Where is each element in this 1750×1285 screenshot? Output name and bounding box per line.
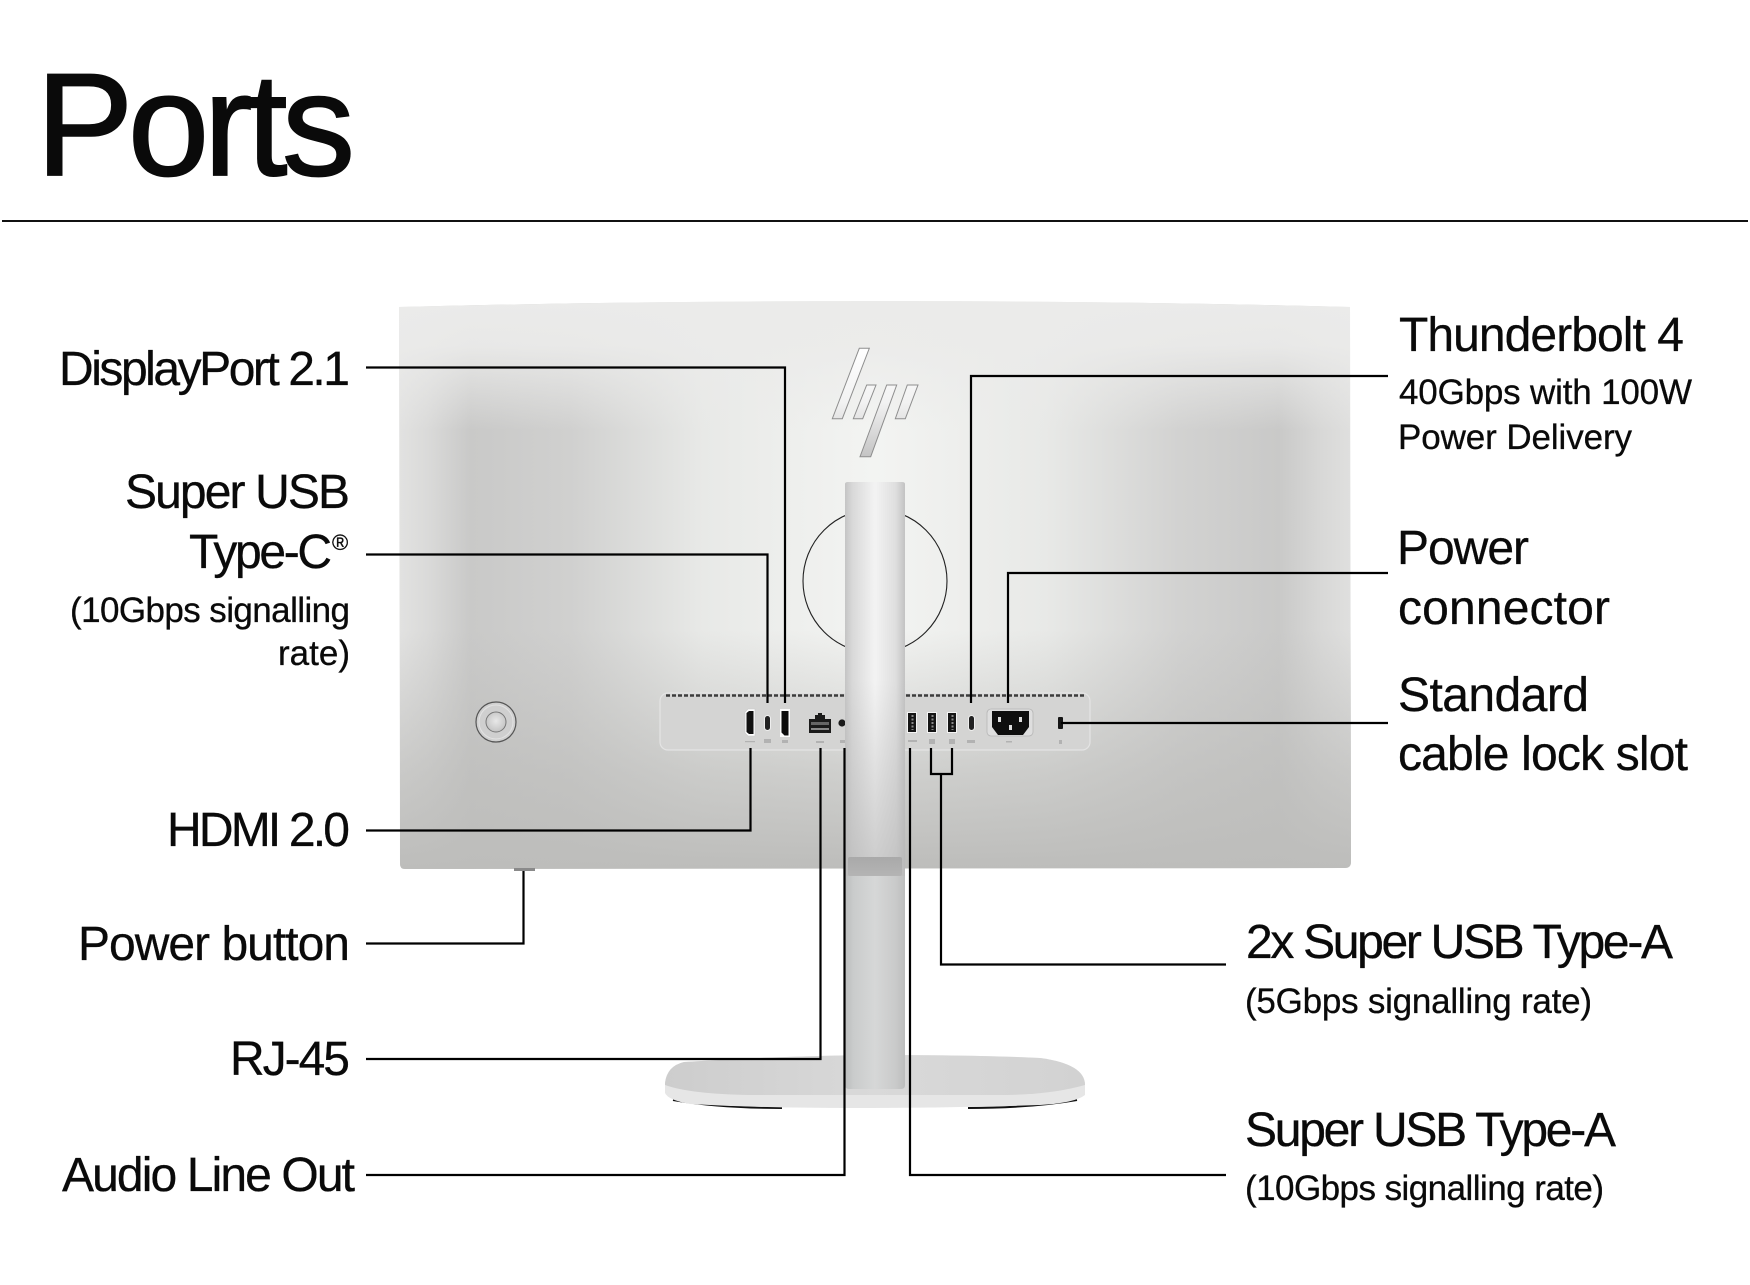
label: Thunderbolt 4: Power Delivery bbox=[1398, 418, 1632, 457]
monitor back panel bbox=[399, 301, 1351, 869]
label: Super USB Type-C bbox=[70, 466, 350, 673]
label: Super USB Type-C: Type-C bbox=[189, 526, 332, 579]
port: Super USB Type-A 5Gbps bbox=[927, 712, 937, 733]
leader line: Power button bbox=[366, 871, 524, 944]
leader line: RJ-45 bbox=[366, 748, 820, 1059]
port: RJ-45 bbox=[809, 713, 831, 733]
label: 2x Super USB Type-A bbox=[1245, 916, 1673, 1021]
port: lock slot bbox=[1058, 717, 1063, 729]
label: Thunderbolt 4: 40Gbps with 100W bbox=[1399, 373, 1692, 412]
leader line: 2x Super USB Type-A bbox=[931, 748, 1226, 964]
label: Power button: Power button bbox=[78, 918, 350, 971]
leader line: DisplayPort 2.1 bbox=[366, 368, 785, 703]
label: Super USB Type-A: Super USB Type-A bbox=[1245, 1104, 1616, 1157]
label: 2x Super USB Type-A: 2x Super USB Type-A bbox=[1246, 916, 1673, 969]
label: Super USB Type-C: (10Gbps signalling bbox=[70, 591, 350, 630]
label: Standard cable lock slot: Standard bbox=[1398, 669, 1589, 722]
label: DisplayPort 2.1: DisplayPort 2.1 bbox=[59, 343, 350, 396]
port: DisplayPort bbox=[780, 709, 790, 737]
label: Power connector: Power bbox=[1397, 522, 1529, 575]
label: Standard cable lock slot bbox=[1398, 669, 1688, 781]
port panel bbox=[660, 693, 1090, 750]
label: Super USB Type-A: (10Gbps signalling rate) bbox=[1245, 1169, 1604, 1208]
label: Power connector bbox=[1397, 522, 1610, 635]
label: RJ-45: RJ-45 bbox=[230, 1033, 350, 1086]
title: Ports bbox=[36, 43, 355, 206]
port: Super USB Type-A 5Gbps bbox=[947, 712, 957, 733]
label: Super USB Type-C: Super USB bbox=[125, 466, 350, 519]
stand neck bbox=[845, 482, 905, 1089]
label: Power connector: connector bbox=[1398, 582, 1610, 635]
leader line: Power connector bbox=[1008, 573, 1388, 703]
monitor illustration bbox=[399, 301, 1351, 1108]
port: Super USB Type-A 10Gbps bbox=[907, 712, 917, 733]
leader line: HDMI 2.0 bbox=[366, 748, 750, 830]
label: Standard cable lock slot: cable lock slot bbox=[1398, 728, 1688, 781]
leader line: Audio Line Out bbox=[366, 748, 844, 1175]
port: audio jack bbox=[838, 719, 846, 727]
leader line: Super USB Type-C bbox=[366, 554, 768, 703]
mount circle bbox=[803, 509, 947, 653]
port: HDMI bbox=[745, 709, 755, 736]
label: 2x Super USB Type-A: (5Gbps signalling rate) bbox=[1245, 982, 1592, 1021]
label: Thunderbolt 4 bbox=[1398, 309, 1692, 457]
port icons bbox=[745, 739, 1062, 744]
label: Super USB Type-C: ® bbox=[332, 530, 348, 555]
port: Thunderbolt 4 bbox=[968, 715, 975, 731]
leader line: Standard cable lock slot bbox=[1061, 722, 1388, 724]
leader line: Thunderbolt 4 bbox=[971, 376, 1388, 703]
port: Super USB Type-C bbox=[764, 715, 771, 731]
base of stand bbox=[665, 1055, 1085, 1108]
rear dial button bbox=[476, 702, 516, 742]
label: Super USB Type-A bbox=[1245, 1104, 1616, 1208]
port: power connector bbox=[987, 709, 1033, 736]
power button nub bbox=[514, 868, 535, 871]
leader line: Super USB Type-A 10Gbps bbox=[910, 748, 1226, 1175]
label: HDMI 2.0: HDMI 2.0 bbox=[167, 804, 350, 857]
label: Super USB Type-C: rate) bbox=[278, 634, 350, 673]
HP logo bbox=[832, 348, 918, 457]
label: Audio Line Out: Audio Line Out bbox=[62, 1149, 355, 1202]
label: Thunderbolt 4: Thunderbolt 4 bbox=[1399, 309, 1684, 362]
